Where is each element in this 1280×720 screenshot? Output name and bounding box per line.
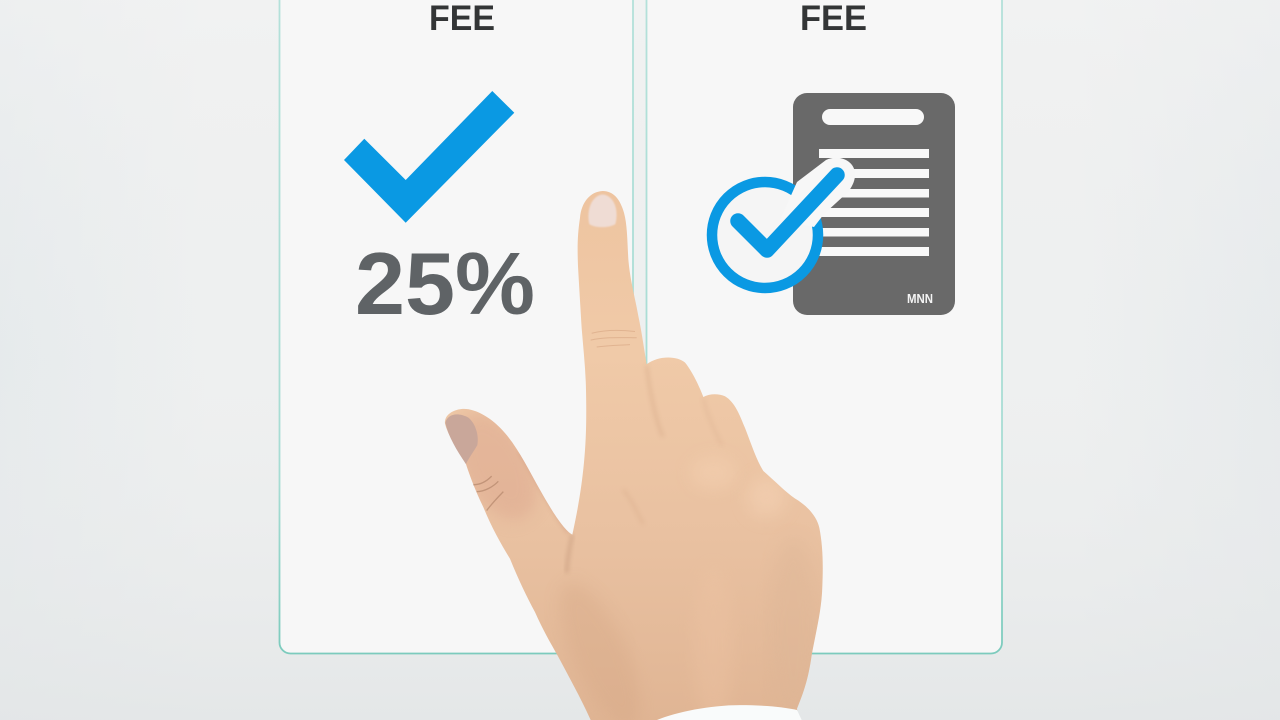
check badge ring [712,182,818,288]
figure: 25 percent: 25% [355,234,535,333]
hand pointing between the cards [439,191,823,720]
document sheet [793,93,955,315]
check badge white outline [780,158,855,227]
panel: left fee card [280,0,633,654]
thumb joint creases [473,476,503,511]
hand, thumb and index finger [445,191,823,720]
panel: right fee card [646,0,1002,654]
index finger joint creases [591,330,637,347]
document logo mark: MNN [907,292,933,306]
thumbnail [445,414,478,464]
skin shading and knuckles [439,366,817,720]
heading: right FEE: FEE [800,0,867,38]
icon: document with check badge [712,93,955,315]
check badge tick [738,175,837,250]
white shirt cuff [657,705,802,720]
document text lines [819,149,929,256]
index fingernail [588,194,617,227]
document title bar [822,109,924,125]
heading: left FEE: FEE [429,0,495,38]
icon: blue check mark [344,91,514,223]
